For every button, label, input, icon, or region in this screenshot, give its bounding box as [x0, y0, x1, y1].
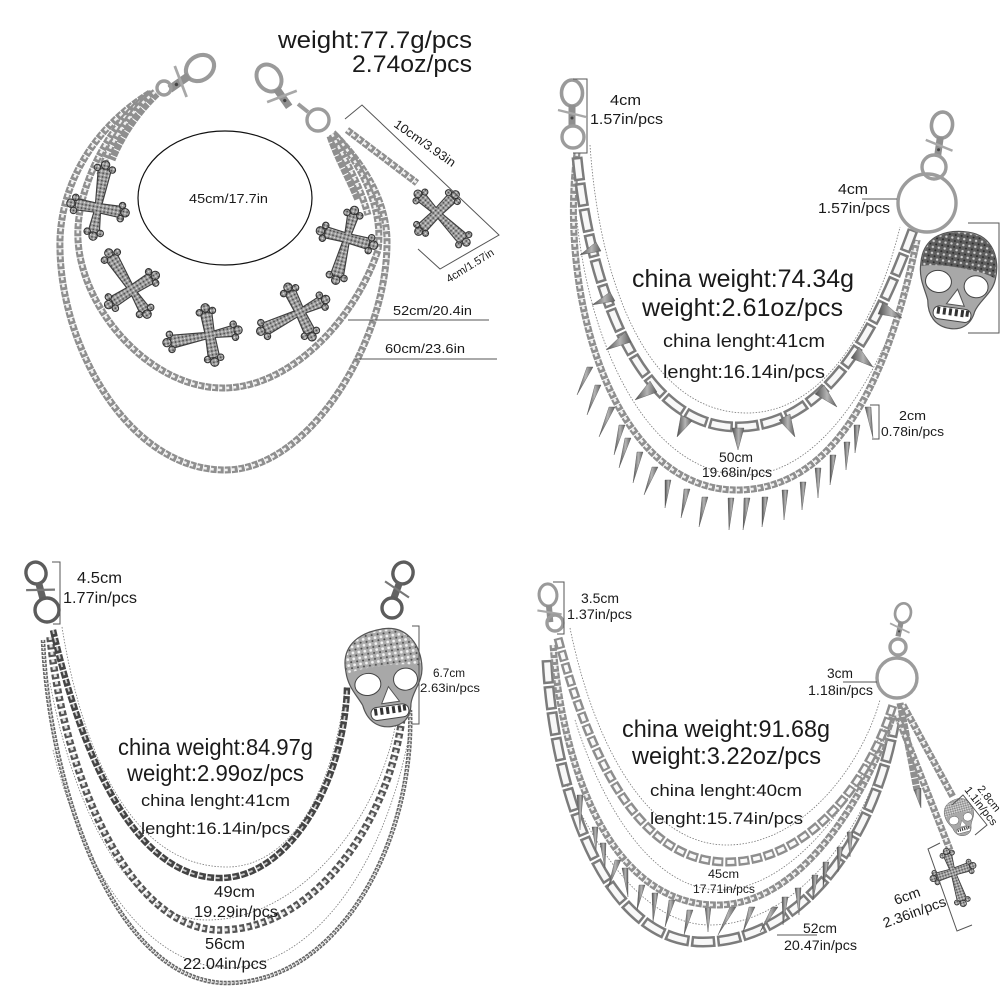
icon: hanging fringe spikes [577, 367, 873, 530]
icon: five linked crosses [61, 155, 386, 375]
text: weight and length: weight:2.61oz/pcs [641, 294, 843, 322]
icon: left clasp [20, 559, 59, 622]
dimension: skull 6.7cm: 2.63in/pcs [420, 681, 480, 695]
chain: 60cm outer curb chain [60, 93, 387, 470]
chain: paperclip chain [577, 157, 913, 427]
icon: right clasp and rings [877, 601, 917, 698]
text: weight and length: china lenght:41cm [663, 331, 825, 351]
text: weight and length [622, 716, 830, 828]
dimension: 50cm [702, 449, 772, 480]
chain: lower curb chain [573, 153, 917, 490]
dimension: 52cm: 52cm/20.4in [393, 303, 472, 318]
dimension: pendant bracket: 10cm/3.93in [391, 117, 458, 170]
text: weight and length: lenght:15.74in/pcs [650, 809, 803, 828]
panel: top-right spike and skull chain [558, 79, 1000, 530]
heading: weight [277, 27, 472, 78]
dimension: spike 2cm: 0.78in/pcs [881, 424, 945, 439]
icon: small skull charm [941, 796, 979, 839]
dimension: 52cm: 52cm [803, 920, 837, 936]
icon: left clasp [535, 583, 563, 631]
dimension: dotted guides [565, 628, 885, 925]
dimension: left clasp 4.5cm: 1.77in/pcs [63, 590, 137, 607]
dimension: 45cm: 17.71in/pcs [693, 882, 755, 896]
chain: dark curb chain [53, 630, 347, 878]
chain: pendant chain [347, 130, 417, 183]
panel: top-left cross chain [60, 27, 499, 470]
dimension: left clasp 3.5cm: 1.37in/pcs [567, 606, 632, 622]
dimension: pendant bracket: 4cm/1.57in [444, 247, 496, 286]
dimension: left clasp 4cm: 1.57in/pcs [590, 112, 663, 128]
text: weight and length: lenght:16.14in/pcs [663, 362, 825, 382]
heading: weight: 2.74oz/pcs [352, 51, 472, 78]
dimension: left clasp 4cm: 4cm [610, 93, 641, 109]
dimension: 50cm: 50cm [719, 449, 753, 465]
dimension: left clasp 4cm [573, 79, 663, 153]
callout: 45cm ellipse: 45cm/17.7in [189, 191, 268, 206]
text: weight and length: weight:3.22oz/pcs [631, 743, 821, 770]
dimension: 56cm [183, 936, 267, 973]
dimension: left clasp 4.5cm: 4.5cm [77, 570, 122, 587]
dimension: 56cm: 56cm [205, 936, 245, 953]
icon: right clasp [380, 558, 420, 618]
chain: charm chains [897, 703, 953, 850]
chain: upper strands to cross chain [100, 92, 368, 215]
dimension: 49cm [194, 884, 278, 921]
dimension: 45cm: 45cm [708, 867, 739, 881]
icon: pendant cross [394, 170, 490, 266]
dimension: 60cm: 60cm/23.6in [385, 341, 465, 356]
icon: spike charm [914, 788, 921, 808]
dimension: 49cm: 19.29in/pcs [194, 904, 278, 921]
text: weight and length: china lenght:40cm [650, 781, 802, 800]
dimension: cross charm 6cm: 2.36in/pcs [881, 893, 948, 931]
dimension: skull charm 2.8cm: 1.1in/pcs [962, 784, 1000, 829]
dimension: ring 4cm: 1.57in/pcs [818, 201, 890, 217]
text: weight and length [632, 265, 854, 382]
chain: 52cm middle chain [78, 93, 379, 388]
dimension: ring 4cm [818, 182, 897, 217]
icon: left clasp [157, 46, 221, 102]
text: weight and length: china weight:91.68g [622, 716, 830, 743]
text: weight and length: lenght:16.14in/pcs [141, 819, 290, 838]
icon: skull [341, 624, 430, 732]
dimension: 50cm: 19.68in/pcs [702, 464, 772, 480]
dimension: 52cm: 20.47in/pcs [784, 937, 857, 953]
dimension: skull 6.7cm: 6.7cm [433, 666, 465, 680]
dimension: cross charm 6cm: 6cm [892, 884, 922, 908]
dimension: skull 6.7cm [412, 626, 480, 724]
icon: large spikes [580, 242, 902, 450]
dimension: skull charm 2.8cm [952, 783, 1000, 835]
icon: cross charm [922, 841, 987, 914]
icon: right clasp and rings [898, 110, 958, 232]
text: weight and length [118, 734, 313, 838]
icon: hanging spikes [577, 795, 853, 935]
dimension: dotted guides [577, 145, 920, 475]
text: weight and length: china lenght:41cm [141, 791, 290, 810]
dimension: ring 4cm: 4cm [838, 182, 868, 198]
callout: 45cm ellipse [138, 131, 312, 265]
heading: weight: weight:77.7g/pcs [277, 27, 472, 54]
dimension: ring 3cm: 3cm [827, 665, 853, 681]
panel: bottom-right multi-chain with charms [535, 582, 1000, 953]
dimension: ring 3cm: 1.18in/pcs [808, 682, 873, 698]
dimension: pendant bracket [345, 105, 499, 286]
panel: bottom-left dark chain with skull [20, 558, 480, 983]
dimension: skull bracket [968, 223, 999, 333]
dimension: left clasp 3.5cm [553, 582, 632, 634]
chain: box chain [50, 637, 403, 930]
dimension: left clasp 4.5cm [52, 562, 137, 624]
dimension: 56cm: 22.04in/pcs [183, 956, 267, 973]
text: weight and length: china weight:84.97g [118, 734, 313, 760]
text: weight and length: china weight:74.34g [632, 265, 854, 293]
icon: left clasp and ring [558, 80, 586, 148]
icon: skull pendant [912, 226, 1000, 334]
chain: paperclip chain [547, 660, 895, 942]
dimension: spike 2cm [870, 405, 945, 439]
chain: thin outer chain [43, 640, 410, 983]
chain: middle chain [553, 645, 893, 905]
dimension: cross charm 6cm [881, 843, 972, 931]
chain: upper large curb chain [558, 638, 893, 862]
dimension: spike 2cm: 2cm [899, 408, 926, 423]
dimension: ring 3cm [808, 665, 877, 698]
dimension: left clasp 3.5cm: 3.5cm [581, 590, 619, 606]
icon: right clasp [248, 57, 329, 131]
text: weight and length: weight:2.99oz/pcs [126, 760, 304, 786]
dimension: dotted guides [50, 627, 410, 968]
dimension: 52cm [777, 920, 857, 953]
dimension: 45cm [693, 867, 755, 896]
dimension: 49cm: 49cm [214, 884, 255, 901]
